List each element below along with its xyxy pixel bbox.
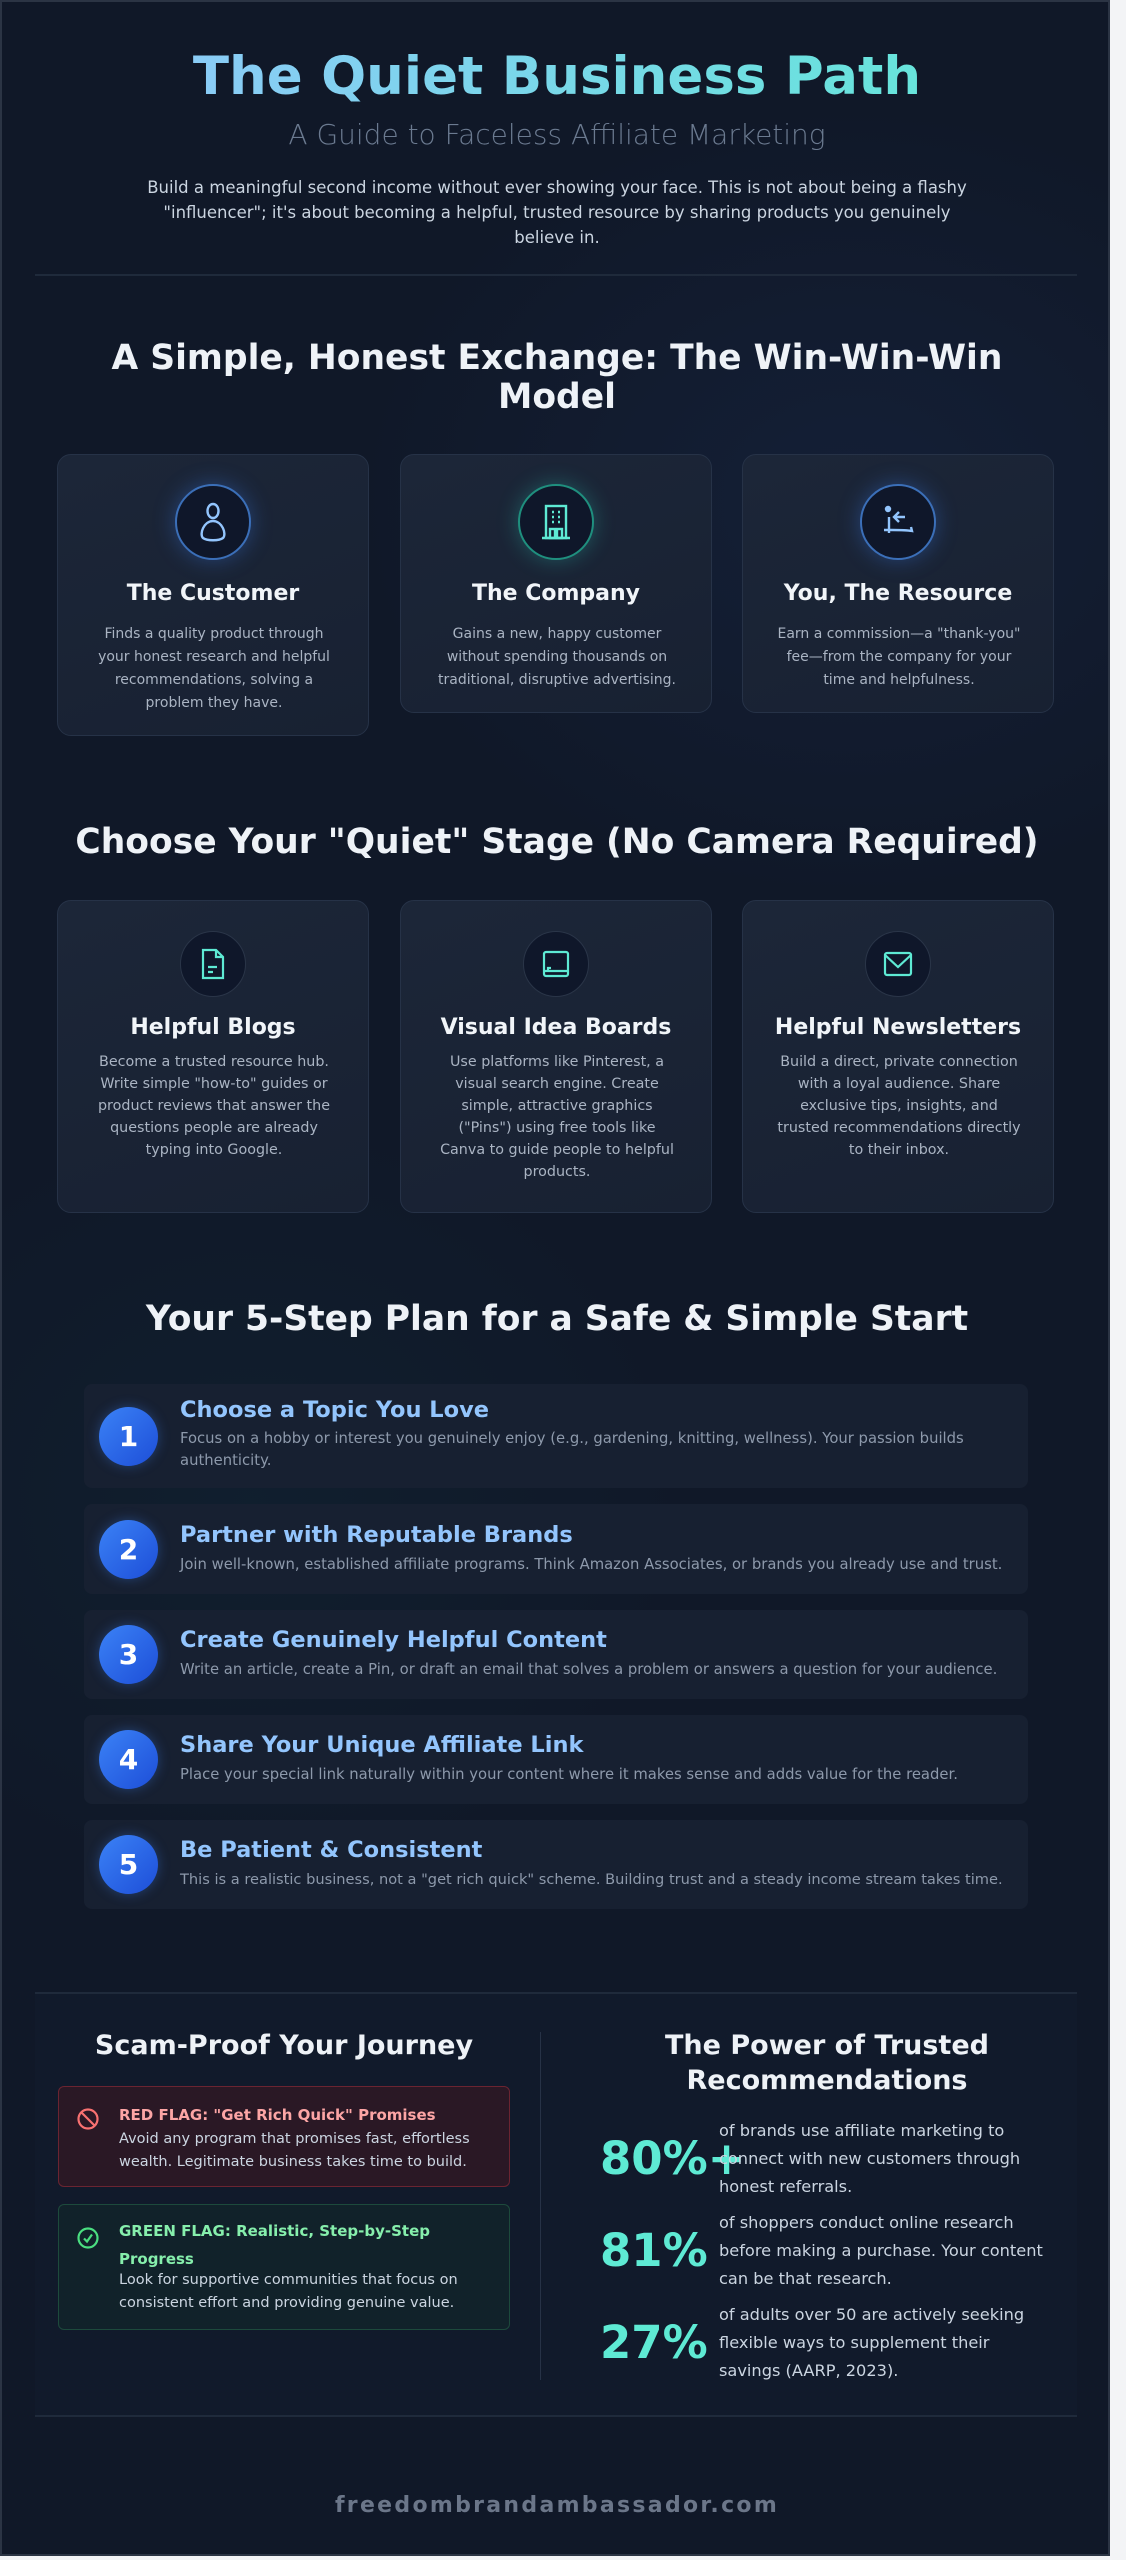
card title: You, The Resource (784, 581, 1012, 606)
icon: prohibited (77, 2108, 99, 2130)
icon: resource (860, 484, 936, 560)
step title: Create Genuinely Helpful Content (180, 1627, 607, 1653)
step 4 (84, 1715, 1028, 1804)
number badge: 4 (119, 1743, 138, 1776)
red flag text: Avoid any program that promises fast, effortless wealth. Legitimate business takes time to build. (119, 2131, 470, 2170)
step 2 (84, 1504, 1028, 1594)
number badge: 2 (119, 1533, 138, 1566)
panel: visual boards (400, 900, 712, 1213)
intro text: Build a meaningful second income without ever showing your face. This is not about being a flashy "influencer"; it's about becoming a helpful, trusted resource by sharing products you genuinely believe in. (147, 178, 967, 247)
step 3 (84, 1610, 1028, 1699)
step 5 (84, 1820, 1028, 1909)
number badge: 5 (119, 1848, 138, 1881)
stat 81%: 81% (600, 2224, 708, 2277)
panel: blogs (57, 900, 369, 1213)
number badge (99, 1520, 158, 1579)
heading: win-win-win: Model (498, 377, 616, 417)
step title: Choose a Topic You Love (180, 1397, 489, 1423)
step text: Place your special link naturally within your content where it makes sense and adds value for the reader. (180, 1766, 958, 1783)
heading: scam-proof: Scam-Proof Your Journey (95, 2030, 473, 2061)
number badge (99, 1407, 158, 1466)
heading: 5-step plan: Your 5-Step Plan for a Safe & Simple Start (146, 1299, 968, 1339)
step title: Partner with Reputable Brands (180, 1522, 573, 1548)
card text: Earn a commission—a "thank-you" fee—from the company for your time and helpfulness. (778, 626, 1020, 688)
card text: Use platforms like Pinterest, a visual search engine. Create simple, attractive graphics ("Pins") using free tools like Canva to guide people to helpful products. (440, 1054, 674, 1180)
heading: power of trusted recommendations (665, 2030, 989, 2096)
icon: building (518, 484, 594, 560)
number badge (99, 1835, 158, 1894)
card text: Build a direct, private connection with a loyal audience. Share exclusive tips, insights, and trusted recommendations directly to their inbox. (777, 1054, 1021, 1158)
icon: check (77, 2227, 99, 2249)
step text: Write an article, create a Pin, or draft an email that solves a problem or answers a question for your audience. (180, 1661, 997, 1678)
card title: Helpful Newsletters (775, 1015, 1021, 1040)
card title: Visual Idea Boards (441, 1015, 671, 1040)
stat 80%: 80%+ (600, 2132, 745, 2185)
green flag text: Look for supportive communities that focus on consistent effort and providing genuine value. (119, 2272, 458, 2311)
icon: document (180, 931, 246, 997)
stat 81%: of shoppers conduct online research before making a purchase. Your content can be that research. (719, 2213, 1043, 2288)
number badge (99, 1730, 158, 1789)
heading: power of trusted recommendations: Recommendations (686, 2065, 968, 2096)
step text: Join well-known, established affiliate programs. Think Amazon Associates, or brands you already use and trust. (180, 1556, 1002, 1573)
step text: Focus on a hobby or interest you genuinely enjoy (e.g., gardening, knitting, wellness). Your passion builds authenticity. (180, 1430, 964, 1469)
card text: Finds a quality product through your honest research and helpful recommendations, solving a problem they have. (98, 626, 330, 711)
icon: person (175, 484, 251, 560)
bottom section panel (35, 1992, 1077, 2417)
card title: The Company (472, 581, 640, 606)
step text: This is a realistic business, not a "get rich quick" scheme. Building trust and a steady income stream takes time. (180, 1871, 1003, 1888)
heading: stages: Choose Your "Quiet" Stage (No Camera Required) (75, 822, 1039, 862)
panel: you (742, 454, 1054, 713)
panel: customer (57, 454, 369, 736)
icon: board (523, 931, 589, 997)
subtitle: A Guide to Faceless Affiliate Marketing (288, 118, 826, 151)
number badge: 3 (119, 1638, 138, 1671)
title: The Quiet Business Path (193, 46, 921, 107)
red flag callout (58, 2086, 510, 2187)
panel: newsletters (742, 900, 1054, 1213)
green flag callout (58, 2204, 510, 2330)
stat 80%: of brands use affiliate marketing to connect with new customers through honest referrals. (719, 2121, 1020, 2196)
number badge (99, 1625, 158, 1684)
step title: Be Patient & Consistent (180, 1837, 482, 1863)
step title: Share Your Unique Affiliate Link (180, 1732, 583, 1758)
card title: The Customer (127, 581, 299, 606)
stat 27%: of adults over 50 are actively seeking flexible ways to supplement their savings (AARP, 2023). (719, 2305, 1024, 2380)
card text: Gains a new, happy customer without spending thousands on traditional, disruptive advertising. (438, 626, 676, 688)
red flag title: RED FLAG: "Get Rich Quick" Promises (119, 2106, 436, 2124)
panel: company (400, 454, 712, 713)
card text: Become a trusted resource hub. Write simple "how-to" guides or product reviews that answer the questions people are already typing into Google. (98, 1054, 330, 1158)
footer url: freedombrandambassador.com (335, 2493, 779, 2518)
heading: win-win-win: A Simple, Honest Exchange: The Win-Win-Win (112, 338, 1002, 378)
number badge: 1 (119, 1420, 138, 1453)
card title: Helpful Blogs (130, 1015, 296, 1040)
green flag title: GREEN FLAG: Realistic, Step-by-Step Progress (119, 2222, 430, 2268)
heading: win-win-win (112, 338, 1002, 417)
title (2, 46, 1112, 107)
heading: power of trusted recommendations: The Power of Trusted (665, 2030, 989, 2061)
icon: envelope (865, 931, 931, 997)
stat 27%: 27% (600, 2316, 708, 2369)
step 1 (84, 1384, 1028, 1488)
